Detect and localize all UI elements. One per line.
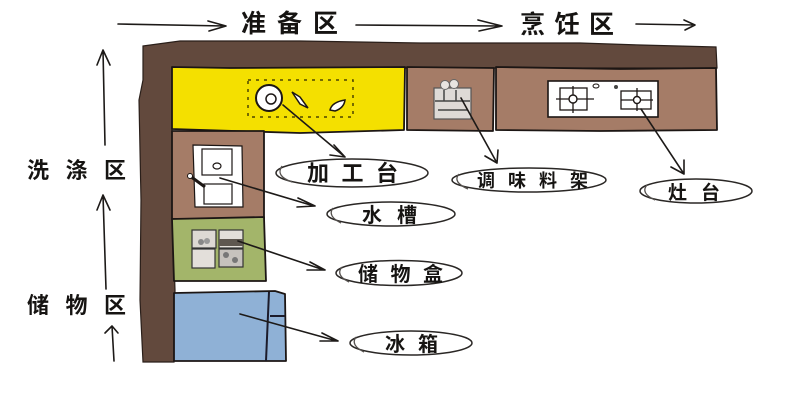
icon: knife [292,92,308,108]
wall: L-shaped counter back [139,41,717,362]
pointer arrow: refrigerator [240,314,338,341]
icon: left burner [556,86,594,113]
pointer arrow: stove [641,109,684,174]
icon: sink [188,145,243,207]
icon: seasoning rack [434,80,471,119]
label: seasoning shelf: 调味料架 [477,171,588,191]
label: storage box: 储物盒 [358,262,443,286]
heading: washing zone: 洗涤区 [27,158,126,183]
panel: sink counter [172,131,264,219]
label: stove: 灶台 [668,181,720,204]
panel: refrigerator [174,291,286,361]
label: stove [640,179,752,204]
label: refrigerator: 冰箱 [385,333,438,356]
heading: storage zone: 储物区 [27,293,126,318]
icon: plate [256,85,282,111]
flow arrow: up to top left [97,50,110,145]
flow arrow: beyond cooking zone [636,20,695,30]
label: storage box [336,260,462,286]
flow arrow: preparation to cooking zone [356,20,502,31]
icon: vegetable [330,100,345,111]
panel: seasoning shelf counter [407,67,494,131]
panel: preparation worktop [172,67,405,133]
label: refrigerator [350,331,472,356]
pointer arrow: seasoning shelf [461,98,498,163]
panel: storage counter [172,217,266,281]
pointer arrow: sink [220,178,315,207]
icon: stove top [548,81,658,117]
pointer arrow: storage box [238,241,325,270]
flow arrow: to preparation zone [118,21,226,31]
panel: stove counter [496,67,717,131]
icon: stove knobs [593,84,618,89]
label: worktop: 加工台 [307,161,398,186]
label: seasoning shelf [452,168,606,192]
label: sink: 水槽 [362,204,417,227]
worktop dotted outline [248,80,353,117]
label: worktop [276,159,428,187]
label: sink [327,202,455,227]
pointer arrow: worktop [283,105,345,157]
flow arrow: storage to washing [97,195,110,289]
icon: storage boxes [192,230,243,268]
icon: right burner [621,88,653,111]
heading: preparation zone: 准备区 [241,10,338,38]
flow arrow: start of storage [105,326,118,361]
heading: cooking zone: 烹饪区 [520,10,614,39]
